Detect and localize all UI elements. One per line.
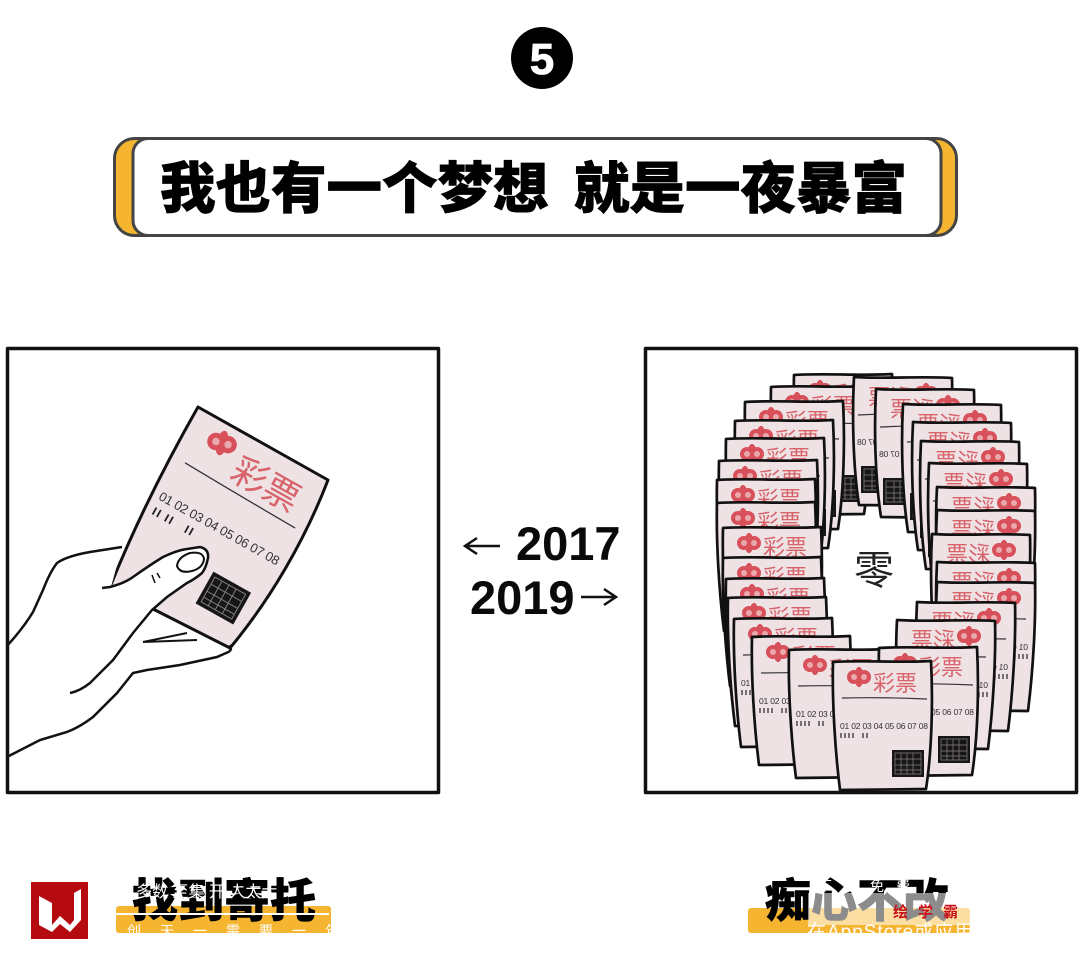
character in the centre: 零 [854,549,894,593]
right arc of tickets: 彩票 [868,385,912,410]
left arc of tickets: 彩票 [792,644,836,669]
left arc of tickets: 01 02 03 04 05 06 07 08 [759,696,847,706]
left arc of tickets: 彩票 [768,605,812,630]
caption: right [748,875,994,943]
title banner: 就是一夜暴富 [574,158,907,220]
right arc of tickets: 彩票 [943,471,987,496]
title banner [114,138,956,236]
ticket: front centre: 彩票 [873,671,917,696]
right arc of tickets: 01 02 03 04 05 06 07 08 [920,662,1008,672]
right arc of tickets: 彩票 [935,449,979,474]
ticket [110,407,328,648]
left arc of tickets: 彩票 [774,626,818,651]
right arc of tickets: 01 02 03 04 05 06 07 08 [879,449,967,459]
left arc of tickets: 彩票 [757,487,801,512]
right arc of tickets: 彩票 [951,570,995,595]
left arc of tickets [717,374,893,778]
left arc of tickets: 彩票 [766,446,810,471]
ticket: 彩票 [224,449,307,520]
right arc of tickets: 01 02 03 04 05 06 07 08 [900,680,988,690]
left arc of tickets: 彩票 [759,468,803,493]
right arc of tickets [853,377,1035,749]
right arc of tickets: 彩票 [911,628,955,653]
left arc of tickets: 彩票 [834,382,878,407]
left arc of tickets: 彩票 [775,428,819,453]
right arc of tickets: 彩票 [931,610,975,635]
panel: zero made of lottery tickets [646,348,1076,792]
ticket: 01 02 03 04 05 06 07 08 [156,489,282,568]
right arc of tickets: 彩票 [951,518,995,543]
caption: left: 多数 至集 开 人太大 [136,883,277,901]
caption: right: 在AppStore或应用宝 [807,921,994,943]
hand outline [0,547,231,760]
left arc of tickets: 彩票 [811,394,855,419]
caption: left [116,875,358,939]
right arc of tickets: 彩票 [946,542,990,567]
ticket: bottom right [879,647,978,776]
ticket: front centre [833,661,932,790]
panel: hand holding lottery ticket [0,348,438,792]
year labels with arrows: 2019 [470,571,575,624]
left arc of tickets: 01 02 03 04 05 06 07 08 [796,709,884,719]
right arc of tickets: 彩票 [917,412,961,437]
caption: right: 下名免费 [818,878,922,894]
title banner: 我也有一个梦想 [160,158,549,220]
number badge: 5 [530,35,554,84]
right arc of tickets: 01 02 03 04 05 06 07 08 [940,642,1028,652]
number badge [511,27,573,89]
left arc of tickets: 彩票 [757,510,801,535]
ticket: bottom right: 彩票 [919,655,963,680]
right arc of tickets: 彩票 [927,430,971,455]
watermark logo [31,882,88,939]
caption: right: 绘学霸 [893,903,968,921]
left arc of tickets: 01 02 03 04 05 06 07 08 [741,678,829,688]
right arc of tickets: 彩票 [951,590,995,615]
right arc of tickets: 彩票 [890,397,934,422]
left arc of tickets: 彩票 [763,565,807,590]
year labels with arrows: 2017 [516,517,621,570]
left arc of tickets: 彩票 [763,535,807,560]
left arc of tickets: 彩票 [785,409,829,434]
left arc of tickets: 彩票 [766,586,810,611]
right arc of tickets: 彩票 [951,495,995,520]
year labels with arrows [465,517,621,624]
right arc of tickets: 01 02 03 04 05 06 07 08 [857,437,945,447]
caption: left: 创天一需要一年 [127,923,358,939]
left arc of tickets: 彩票 [829,657,873,682]
ticket: bottom right: 01 02 03 04 05 06 07 08 [886,707,974,717]
caption: right: 痴心不改 [765,875,949,927]
ticket: front centre: 01 02 03 04 05 06 07 08 [840,721,928,731]
caption: left: 找到寄托 [132,875,316,927]
